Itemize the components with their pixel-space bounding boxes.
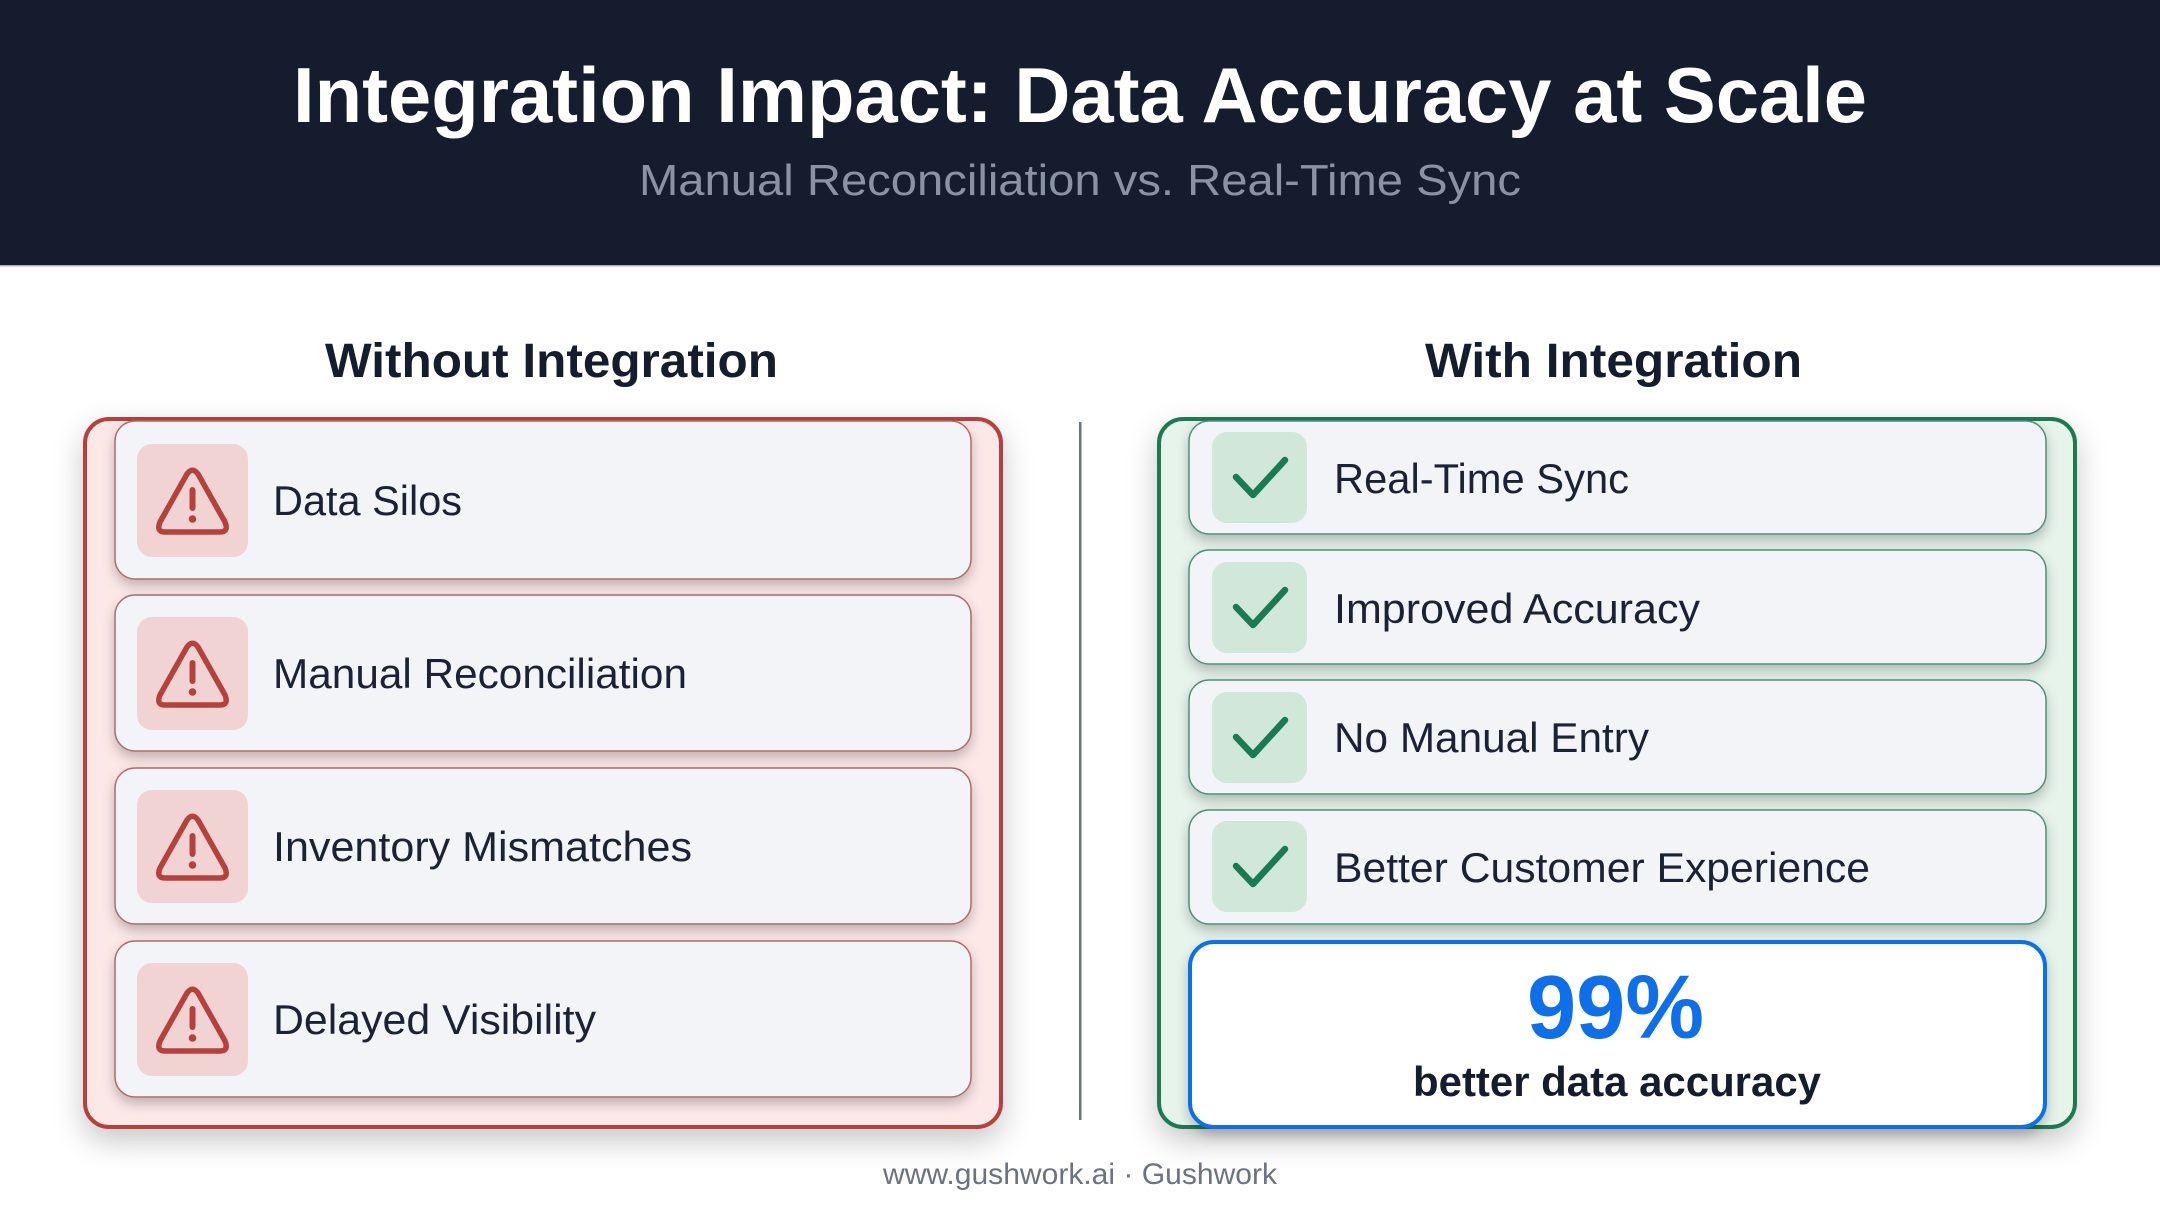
header band — [0, 0, 2160, 266]
label: Data Silos — [273, 477, 462, 524]
icon: check mark — [1212, 432, 1307, 523]
card: better customer experience — [1189, 810, 2046, 924]
label: Better Customer Experience — [1334, 844, 1870, 891]
card: delayed visibility — [115, 941, 971, 1097]
label: Improved Accuracy — [1334, 585, 1700, 632]
icon: warning triangle — [137, 790, 248, 903]
label: Inventory Mismatches — [273, 823, 692, 870]
icon: warning triangle — [137, 963, 248, 1076]
label: No Manual Entry — [1334, 714, 1649, 761]
heading: without integration: Without Integration — [325, 335, 778, 388]
panel: with integration — [1159, 419, 2075, 1127]
callout: 99% better data accuracy — [1190, 942, 2045, 1127]
card: manual reconciliation — [115, 595, 971, 751]
subtitle: Manual Reconciliation vs. Real-Time Sync — [639, 156, 1521, 205]
card: real-time sync — [1189, 421, 2046, 534]
icon: check mark — [1212, 562, 1307, 653]
panel: without integration — [85, 419, 1001, 1127]
icon: warning triangle — [137, 617, 248, 730]
icon: check mark — [1212, 692, 1307, 783]
footer: www.gushwork.ai · Gushwork — [882, 1158, 1278, 1191]
icon: warning triangle — [137, 444, 248, 557]
card: no manual entry — [1189, 680, 2046, 794]
heading: with integration: With Integration — [1425, 335, 1802, 388]
card: inventory mismatches — [115, 768, 971, 924]
stat label: better data accuracy — [1413, 1058, 1822, 1105]
label: Manual Reconciliation — [273, 650, 687, 697]
label: Real-Time Sync — [1334, 455, 1629, 502]
center divider — [1079, 422, 1082, 1120]
stat number: 99% — [1527, 958, 1704, 1058]
card: improved accuracy — [1189, 550, 2046, 664]
title: Integration Impact: Data Accuracy at Scale — [293, 51, 1867, 139]
icon: check mark — [1212, 821, 1307, 912]
card: data silos — [115, 421, 971, 579]
label: Delayed Visibility — [273, 996, 596, 1043]
